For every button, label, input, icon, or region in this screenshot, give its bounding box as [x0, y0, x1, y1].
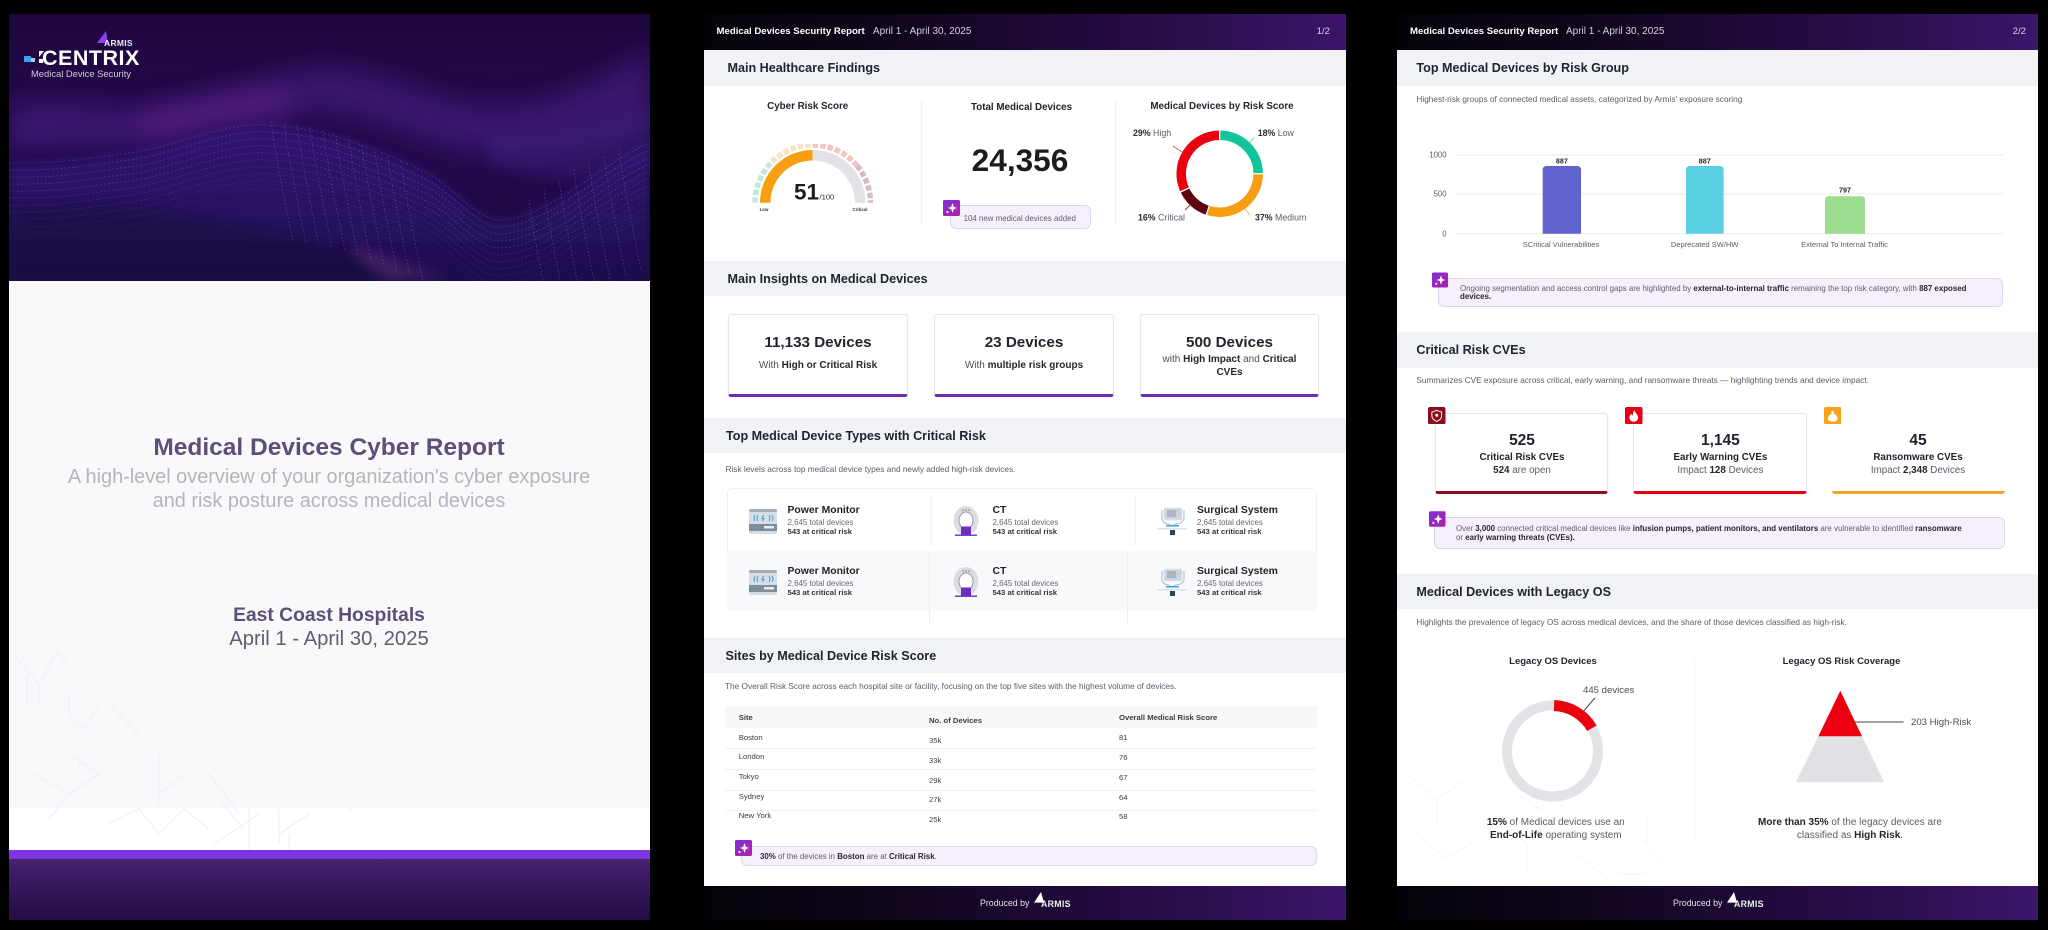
- organization name: East Coast Hospitals: [233, 605, 425, 626]
- heading: devices by risk score: Medical Devices by Risk Score: [1150, 101, 1294, 112]
- bar chart: risk groups: 0: [1442, 230, 1447, 238]
- card: ransomware CVEs: Ransomware CVEs: [1873, 452, 1963, 463]
- dark cover footer: [9, 859, 650, 920]
- table column: risk score: 58: [1119, 812, 1128, 821]
- callout text: or early warning threats (CVEs).: [1456, 533, 1575, 542]
- card: multiple risk groups: [934, 314, 1114, 397]
- device: surgical system row 2: 543 at critical risk: [1197, 588, 1262, 597]
- device: power monitor row 2: 2,645 total devices: [788, 579, 853, 588]
- section header: risk group: Top Medical Devices by Risk Group: [1416, 61, 1629, 75]
- bar chart: risk groups: 500: [1434, 190, 1447, 198]
- table column: devices: 25k: [929, 814, 941, 824]
- bar chart: risk groups: 797: [1839, 186, 1851, 194]
- logo word CENTRIX: CENTRIX: [42, 46, 140, 70]
- page header: [704, 14, 1346, 50]
- card: early warning CVEs: Impact 128 Devices: [1677, 465, 1763, 476]
- device: surgical system: [1197, 504, 1278, 536]
- device: CT: CT: [992, 504, 1006, 516]
- heading: legacy OS devices: Legacy OS Devices: [1509, 656, 1597, 667]
- logo: Armis Centrix: [24, 31, 140, 79]
- section description: Highest-risk groups of connected medical assets, categorized by Armis' exposure scoring: [1416, 94, 1742, 104]
- device: CT row 2: CT: [992, 566, 1006, 576]
- callout: new devices: [950, 205, 1091, 229]
- card: ransomware CVEs: 45: [1909, 432, 1927, 449]
- caption: legacy OS share: 15% of Medical devices use an: [1487, 817, 1625, 828]
- gauge: cyber risk score 51 of 100: Low: [760, 207, 769, 212]
- section header: risk group: [1397, 50, 2038, 86]
- section header: legacy OS: Medical Devices with Legacy OS: [1416, 584, 1611, 598]
- callout text: [1460, 284, 1966, 301]
- callout text: 30% of the devices in Boston are at Critical Risk.: [760, 852, 937, 860]
- table column: site: Sydney: [739, 792, 764, 801]
- device: power monitor: 2,645 total devices: [788, 518, 853, 527]
- logo: Armis: ARMIS: [1041, 899, 1071, 909]
- donut chart: devices by risk score: 29% High: [1133, 128, 1171, 138]
- table header row: No. of Devices: [929, 716, 982, 725]
- icon: surgical system: [1157, 508, 1187, 535]
- icon: money bag: [1824, 407, 1841, 424]
- callout text: Ongoing segmentation and access control gaps are highlighted by external-to-internal traffic remaining the top risk category, with 887 exposed: [1460, 284, 1966, 292]
- cover subtitle: [68, 466, 590, 512]
- table: sites by risk score: [725, 713, 1317, 824]
- panel: cover page: [9, 14, 650, 920]
- device: CT row 2: 2,645 total devices: [992, 579, 1058, 588]
- icon: flame: [1625, 407, 1642, 424]
- device: CT row 2: 543 at critical risk: [992, 588, 1057, 597]
- panel: report page 1: [704, 14, 1346, 920]
- table column: site: New York: [739, 811, 771, 820]
- card: critical risk CVEs: [1435, 413, 1608, 494]
- table column: site: [738, 733, 772, 820]
- hero: purple data wave image: [9, 14, 650, 281]
- device: power monitor: Power Monitor: [788, 504, 860, 516]
- page number: 1/2: [1317, 26, 1330, 37]
- section header: main findings: [704, 50, 1346, 86]
- page footer: [1397, 886, 2038, 920]
- bar chart: risk groups: 887: [1556, 156, 1568, 166]
- table column: site: Boston: [739, 733, 763, 742]
- page footer: [704, 886, 1346, 920]
- section header: top device types: Top Medical Device Types with Critical Risk: [726, 428, 986, 442]
- table column: risk score: 64: [1119, 792, 1128, 802]
- cover subtitle: and risk posture across medical devices: [153, 490, 505, 512]
- caption: high-risk share: [1758, 817, 1942, 841]
- bar chart: risk groups: 887: [1699, 156, 1711, 166]
- table column: risk score: 76: [1119, 752, 1128, 762]
- card: multiple risk groups: With multiple risk groups: [965, 360, 1083, 371]
- logo tagline: Medical Device Security: [31, 68, 131, 79]
- gauge: cyber risk score 51 of 100: /100: [820, 192, 834, 202]
- callout text: [1456, 524, 1962, 542]
- device: power monitor: [788, 504, 860, 536]
- section description: Summarizes CVE exposure across critical, early warning, and ransomware threats — highlighting trends and device impact.: [1416, 376, 1869, 385]
- device: power monitor row 2: 543 at critical risk: [788, 588, 852, 597]
- caption: high-risk share: More than 35% of the legacy devices are: [1758, 817, 1942, 828]
- caption: legacy OS share: [1487, 817, 1625, 841]
- table column: risk score: [1119, 733, 1128, 821]
- card: critical risk CVEs: 525: [1509, 432, 1535, 449]
- donut chart: legacy OS devices: [1502, 685, 1634, 802]
- device: power monitor row 2: [788, 566, 860, 597]
- callout text: 104 new medical devices added: [964, 214, 1076, 222]
- cover title: Medical Devices Cyber Report: [153, 434, 505, 461]
- section header: top device types: [704, 418, 1346, 453]
- heading: cyber risk score: Cyber Risk Score: [767, 101, 848, 112]
- icon: sparkle: [1429, 511, 1446, 527]
- section header: sites: [704, 638, 1346, 673]
- pyramid chart: high-risk share: [1796, 690, 1972, 782]
- section header: CVEs: Critical Risk CVEs: [1416, 343, 1526, 357]
- card: ransomware CVEs: [1832, 413, 2005, 494]
- device: CT: 543 at critical risk: [992, 527, 1057, 536]
- header dates: April 1 - April 30, 2025: [1566, 26, 1664, 37]
- table column: site: London: [739, 752, 764, 761]
- donut chart: devices by risk score: 16% Critical: [1138, 213, 1185, 223]
- device: CT: [992, 504, 1058, 536]
- table column: devices: [929, 736, 942, 824]
- device: surgical system: 2,645 total devices: [1197, 518, 1263, 527]
- card: critical risk CVEs: 524 are open: [1493, 465, 1551, 476]
- table header row: Overall Medical Risk Score: [1119, 713, 1217, 722]
- bar chart: risk groups: SCritical Vulnerabilities: [1523, 240, 1599, 249]
- card: multiple risk groups: 23 Devices: [985, 334, 1063, 351]
- caption: high-risk share: classified as High Risk.: [1797, 830, 1903, 841]
- heading: legacy OS risk coverage: Legacy OS Risk Coverage: [1783, 656, 1900, 667]
- device: surgical system: 543 at critical risk: [1197, 527, 1262, 536]
- device: surgical system row 2: 2,645 total devices: [1197, 579, 1263, 588]
- callout text: devices.: [1460, 292, 1491, 301]
- table column: risk score: 81: [1119, 733, 1128, 742]
- card: early warning CVEs: Early Warning CVEs: [1673, 452, 1767, 463]
- decorative network pattern: [1397, 754, 1757, 884]
- section description: Risk levels across top medical device types and newly added high-risk devices.: [726, 465, 1015, 474]
- device: power monitor row 2: Power Monitor: [788, 566, 860, 576]
- page number: 2/2: [2013, 26, 2026, 37]
- device: surgical system: Surgical System: [1197, 504, 1278, 516]
- logo word ARMIS: ARMIS: [104, 38, 133, 48]
- table column: devices: 35k: [929, 736, 941, 745]
- table column: site: Tokyo: [739, 772, 759, 781]
- panel: report page 2: [1397, 14, 2038, 920]
- section header: CVEs: [1397, 332, 2038, 368]
- section header: legacy OS: [1397, 574, 2038, 609]
- table header row: Site: [739, 713, 753, 722]
- card: high impact critical CVEs: 500 Devices: [1186, 334, 1273, 351]
- logo: Armis: [1034, 892, 1071, 909]
- icon: sparkle: [943, 200, 960, 216]
- purple cover band: [9, 850, 650, 859]
- device: CT: 2,645 total devices: [992, 518, 1058, 527]
- footer credit: Produced by: [1673, 898, 1722, 908]
- device: surgical system row 2: [1197, 566, 1278, 597]
- icon: CT scanner: [954, 506, 978, 536]
- card: critical risk CVEs: Critical Risk CVEs: [1480, 452, 1564, 463]
- table column: devices: 29k: [929, 776, 941, 784]
- bar chart: risk groups: 1000: [1429, 150, 1447, 160]
- section header: main findings: Main Healthcare Findings: [728, 61, 880, 75]
- card: ransomware CVEs: Impact 2,348 Devices: [1871, 465, 1965, 476]
- card: high impact critical CVEs: CVEs: [1216, 367, 1243, 378]
- section header: main insights: [704, 261, 1346, 296]
- icon: shield: [1428, 407, 1446, 424]
- report period: April 1 - April 30, 2025: [229, 628, 429, 650]
- metric: total devices: 24,356: [972, 142, 1068, 178]
- footer credit: Produced by: [980, 898, 1029, 908]
- callout: ransomware exposure: [1434, 517, 2005, 549]
- callout text: Over 3,000 connected critical medical devices like infusion pumps, patient monitors, and ventilators are vulnerable to identified ransomware: [1456, 524, 1962, 533]
- cover subtitle: A high-level overview of your organization's cyber exposure: [68, 466, 590, 488]
- card: early warning CVEs: 1,145: [1701, 432, 1740, 449]
- table column: devices: 33k: [929, 756, 941, 764]
- bar chart: risk groups: External To Internal Traffic: [1801, 240, 1888, 249]
- heading: total medical devices: Total Medical Devices: [971, 102, 1072, 112]
- card: high or critical risk devices: 11,133 Devices: [764, 334, 872, 351]
- pyramid chart: high-risk share: 203 High-Risk: [1911, 717, 1971, 728]
- card: high impact critical CVEs: with High Impact and Critical: [1163, 354, 1296, 365]
- page header: [1397, 14, 2038, 50]
- gauge: cyber risk score 51 of 100: 51: [794, 180, 819, 204]
- gauge: cyber risk score 51 of 100: [752, 144, 874, 212]
- section header: main insights: Main Insights on Medical Devices: [728, 272, 928, 286]
- callout: Boston critical risk: [741, 846, 1317, 866]
- caption: legacy OS share: End-of-Life operating system: [1490, 830, 1622, 841]
- icon: CT scanner row 2: [954, 567, 978, 597]
- panel: device type grid: [727, 488, 1317, 611]
- device: power monitor: 543 at critical risk: [788, 527, 852, 536]
- section description: The Overall Risk Score across each hospital site or facility, focusing on the top five sites with the highest volume of devices.: [725, 682, 1176, 691]
- card: high or critical risk devices: With High or Critical Risk: [759, 360, 877, 371]
- table header row: [739, 713, 1217, 725]
- table column: devices: 27k: [929, 795, 941, 804]
- icon: sparkle: [1432, 272, 1448, 288]
- white footer strip: [9, 808, 650, 850]
- logo: Armis: ARMIS: [1734, 899, 1764, 909]
- header dates: April 1 - April 30, 2025: [873, 26, 971, 37]
- gauge: cyber risk score 51 of 100: Critical: [853, 207, 867, 212]
- donut chart: devices by risk score: 37% Medium: [1255, 213, 1306, 223]
- icon: power monitor: [749, 509, 777, 534]
- bar chart: risk groups: [1429, 150, 2003, 249]
- donut chart: legacy OS devices: 445 devices: [1583, 685, 1634, 696]
- device: CT row 2: [992, 566, 1058, 597]
- bar chart: risk groups: Deprecated SW/HW: [1671, 240, 1739, 249]
- section header: sites: Sites by Medical Device Risk Score: [726, 648, 936, 662]
- table column: risk score: 67: [1119, 772, 1128, 782]
- card: high or critical risk devices: [728, 314, 908, 397]
- card: early warning CVEs: [1633, 413, 1807, 494]
- section description: Highlights the prevalence of legacy OS across medical devices, and the share of those devices classified as high-risk.: [1416, 618, 1847, 627]
- header title: Medical Devices Security Report: [716, 26, 865, 37]
- icon: sparkle: [735, 840, 752, 856]
- donut chart: devices by risk score: [1133, 128, 1306, 223]
- callout: external traffic: [1438, 278, 2003, 307]
- icon: power monitor row 2: [749, 570, 777, 595]
- logo: Armis: [1725, 890, 1767, 912]
- decorative network pattern: [49, 808, 351, 850]
- device: surgical system row 2: Surgical System: [1197, 566, 1278, 576]
- donut chart: devices by risk score: 18% Low: [1258, 128, 1295, 138]
- icon: surgical system row 2: [1157, 568, 1187, 596]
- header title: Medical Devices Security Report: [1410, 26, 1558, 37]
- card: high impact critical CVEs: [1140, 314, 1319, 397]
